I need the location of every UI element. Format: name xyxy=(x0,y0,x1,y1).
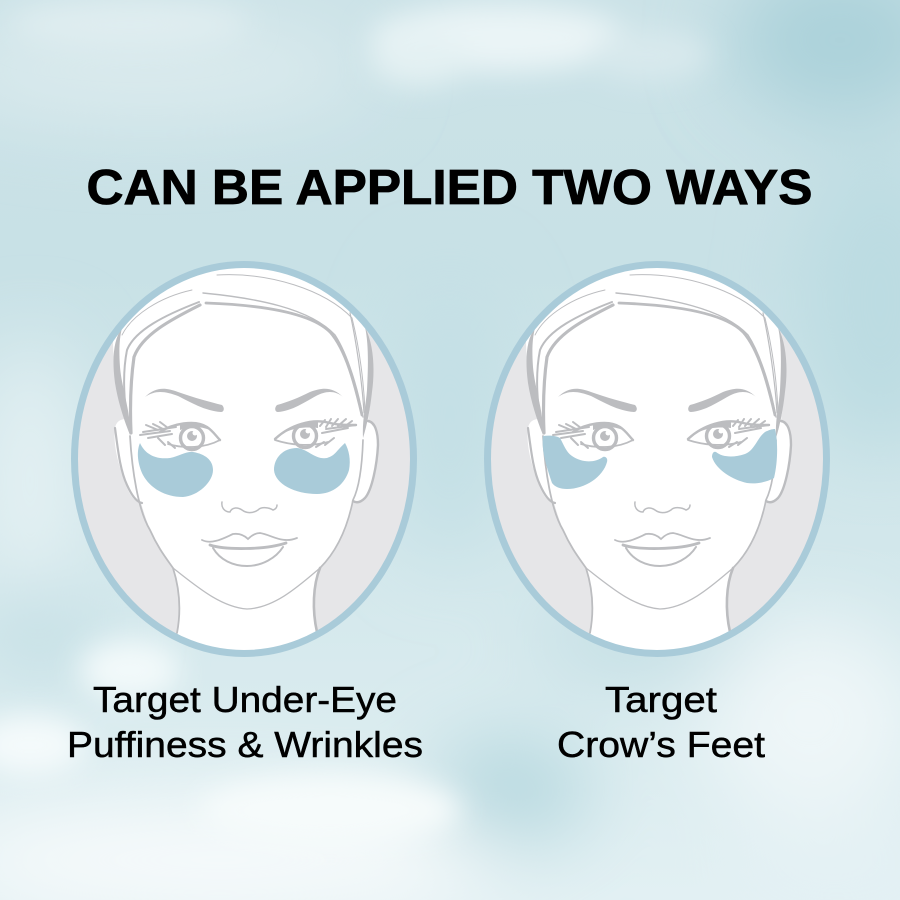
caption: under-eye xyxy=(67,679,423,765)
under-eye patch: left xyxy=(138,443,213,497)
crow's feet patch: left xyxy=(543,436,607,489)
title: CAN BE APPLIED TWO WAYS xyxy=(86,161,812,215)
under-eye patch: right xyxy=(274,443,350,494)
crow's feet patch: right xyxy=(712,429,777,483)
oval frame xyxy=(488,264,826,654)
oval frame xyxy=(74,264,414,654)
caption: crow's feet: Crow’s Feet xyxy=(557,724,765,765)
illustration: crow's feet placement xyxy=(473,240,843,670)
illustration: under-eye placement xyxy=(60,240,430,670)
caption: under-eye: Target Under-Eye xyxy=(93,679,397,720)
caption: crow's feet: Target xyxy=(605,679,717,720)
caption: crow's feet xyxy=(557,679,765,765)
caption: under-eye: Puffiness & Wrinkles xyxy=(67,724,423,765)
